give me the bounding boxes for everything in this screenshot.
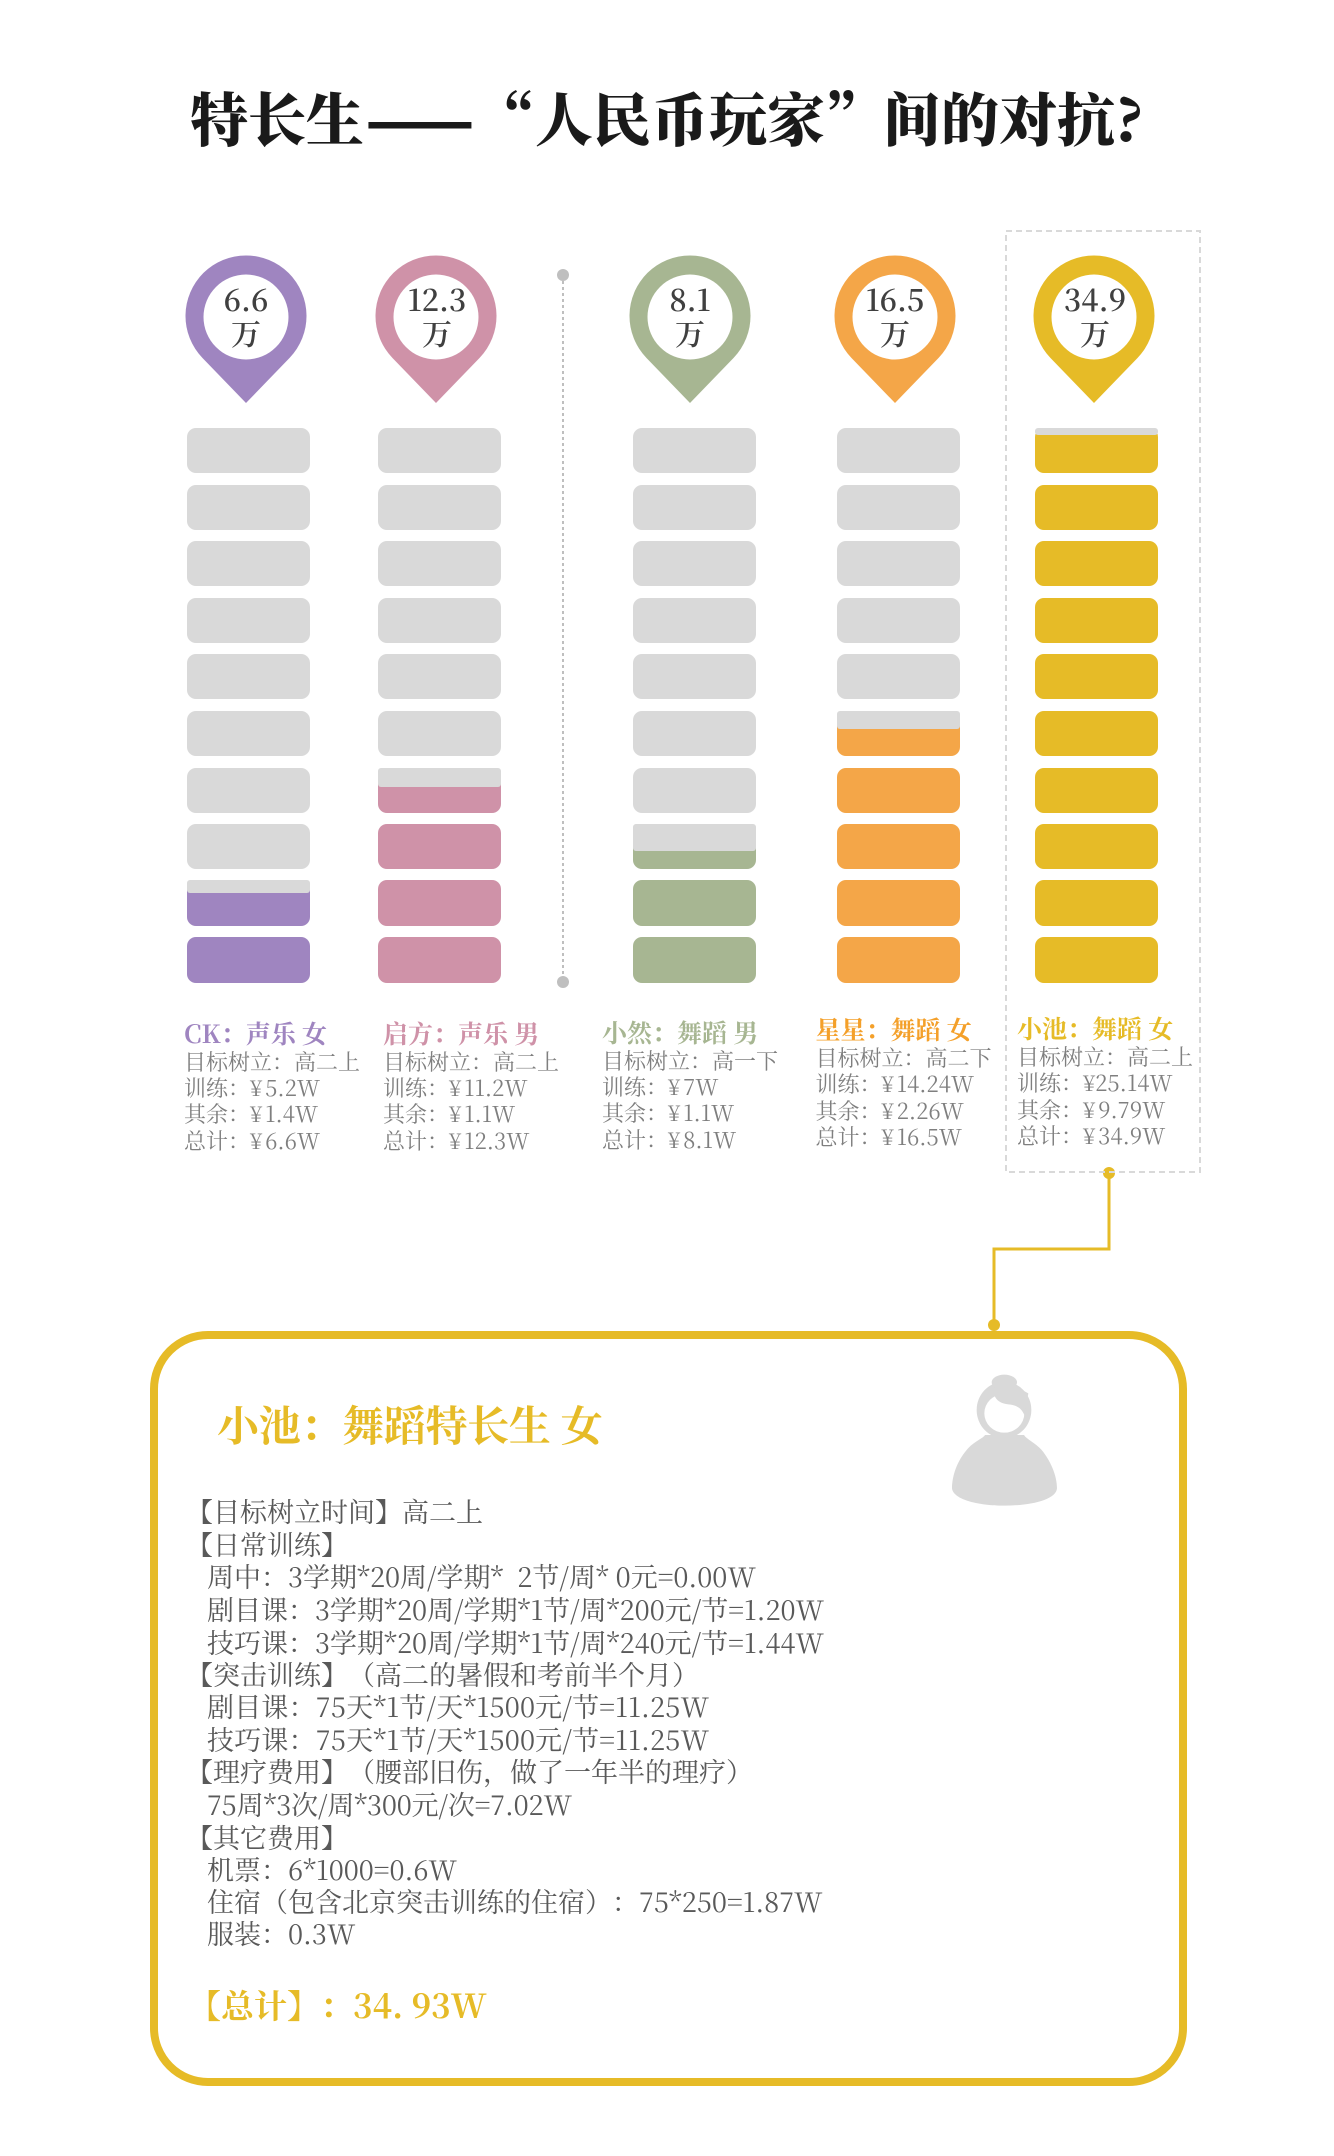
total: 【总计】：34. 93W — [188, 1981, 487, 2028]
panel: 小池 detail — [150, 1331, 1187, 2086]
text block: 小然 costs: 总计：¥8.1W — [602, 1124, 736, 1155]
icon: pin 16.5万 — [834, 256, 956, 403]
text block: 小池 costs — [1017, 1010, 1193, 1151]
text block: 小池 costs: 训练：¥25.14W — [1017, 1067, 1173, 1098]
text block: 星星 costs: 其余：¥2.26W — [816, 1095, 964, 1126]
text block: CK costs: CK：声乐 女 — [184, 1015, 327, 1051]
text block: itemized costs: 剧目课：3学期*20周/学期*1节/周*200元/节=1.20W — [207, 1589, 824, 1628]
text block: 小池 costs: 小池：舞蹈 女 — [1017, 1010, 1173, 1046]
text block: CK costs: 训练：¥5.2W — [184, 1072, 320, 1103]
text block: itemized costs: 【日常训练】 — [186, 1524, 348, 1563]
text block: CK costs: 其余：¥1.4W — [184, 1098, 318, 1129]
panel: CK column — [184, 256, 360, 1156]
text block: 启方 costs: 目标树立：高二上 — [383, 1046, 559, 1077]
text block: itemized costs: 技巧课：75天*1节/天*1500元/节=11.25W — [207, 1719, 709, 1758]
text block: itemized costs — [186, 1491, 824, 1952]
text block: 启方 costs — [383, 1015, 559, 1156]
icon: pin 8.1万: 8.1 — [669, 276, 711, 320]
panel: 小池 column — [1017, 256, 1193, 1151]
text block: itemized costs: 【其它费用】 — [186, 1817, 348, 1856]
icon: pin 8.1万: 万 — [675, 310, 705, 354]
icon: pin 12.3万: 12.3 — [408, 276, 466, 320]
text block: 启方 costs: 启方：声乐 男 — [383, 1015, 539, 1051]
text block: 启方 costs: 训练：¥11.2W — [383, 1072, 528, 1103]
icon: pin 6.6万 — [186, 256, 306, 403]
text block: 小池 costs: 其余：¥9.79W — [1017, 1094, 1165, 1125]
text block: 小然 costs: 目标树立：高一下 — [602, 1045, 778, 1076]
text block: 星星 costs — [816, 1011, 992, 1152]
icon: pin 12.3万 — [376, 256, 496, 403]
text block: itemized costs: 75周*3次/周*300元/次=7.02W — [207, 1784, 572, 1823]
connector from highlighted column to detail panel — [988, 1167, 1115, 1331]
bar stack — [187, 428, 310, 983]
text block: 星星 costs: 目标树立：高二下 — [816, 1042, 992, 1073]
text block: itemized costs: 机票：6*1000=0.6W — [207, 1849, 457, 1888]
text block: 启方 costs: 总计：¥12.3W — [383, 1125, 529, 1156]
text block: 星星 costs: 训练：¥14.24W — [816, 1068, 974, 1099]
text block: 小然 costs: 其余：¥1.1W — [602, 1097, 734, 1128]
text block: 小池 costs: 目标树立：高二上 — [1017, 1041, 1193, 1072]
dashed highlight frame — [1005, 230, 1201, 1173]
text block: 小然 costs: 小然：舞蹈 男 — [602, 1014, 758, 1050]
divider between singing and dance groups — [557, 269, 569, 988]
icon: pin 16.5万: 16.5 — [865, 276, 924, 320]
bar stack — [378, 428, 501, 983]
bar stack — [633, 428, 756, 983]
panel: 启方 column — [376, 256, 559, 1156]
text block: itemized costs: 剧目课：75天*1节/天*1500元/节=11.25W — [207, 1686, 709, 1725]
text block: itemized costs: 周中：3学期*20周/学期* 2节/周* 0元=0.00W — [207, 1556, 756, 1595]
text block: 星星 costs: 星星：舞蹈 女 — [816, 1011, 972, 1047]
icon: pin 34.9万 — [1034, 256, 1154, 403]
icon: pin 6.6万: 万 — [231, 310, 261, 354]
title: — — [416, 75, 475, 159]
icon: pin 12.3万: 万 — [422, 310, 452, 354]
text block: itemized costs: 【突击训练】（高二的暑假和考前半个月） — [186, 1654, 699, 1693]
icon: girl with hair bun — [952, 1374, 1057, 1506]
text block: 小然 costs: 训练：¥7W — [602, 1071, 718, 1102]
text block: CK costs: 总计：¥6.6W — [184, 1125, 320, 1156]
text block: itemized costs: 【目标树立时间】高二上 — [186, 1491, 483, 1530]
icon: pin 8.1万 — [630, 256, 750, 403]
text block: itemized costs: 服装：0.3W — [207, 1913, 355, 1952]
text block: itemized costs: 住宿（包含北京突击训练的住宿）：75*250=1.87W — [207, 1881, 822, 1920]
panel: 小然 column — [602, 256, 778, 1155]
text block: itemized costs: 【理疗费用】（腰部旧伤，做了一年半的理疗） — [186, 1751, 753, 1790]
title: — — [365, 75, 424, 159]
text block: 小然 costs — [602, 1014, 778, 1155]
icon: pin 16.5万: 万 — [880, 310, 910, 354]
text block: 星星 costs: 总计：¥16.5W — [816, 1121, 962, 1152]
title: 特长生 “人民币玩家”间的对抗? — [190, 74, 1144, 158]
text block: CK costs: 目标树立：高二上 — [184, 1046, 360, 1077]
icon: pin 34.9万: 34.9 — [1063, 276, 1126, 320]
bar stack — [837, 428, 960, 983]
text block: 启方 costs: 其余：¥1.1W — [383, 1098, 515, 1129]
bar stack — [1035, 428, 1158, 983]
icon: pin 6.6万: 6.6 — [224, 276, 268, 320]
text block: 小池 costs: 总计：¥34.9W — [1017, 1120, 1165, 1151]
text block: CK costs — [184, 1015, 360, 1156]
text block: itemized costs: 技巧课：3学期*20周/学期*1节/周*240元/节=1.44W — [207, 1622, 824, 1661]
panel: 星星 column — [816, 256, 992, 1152]
detail heading: 小池：舞蹈特长生 女 — [217, 1394, 603, 1454]
icon: pin 34.9万: 万 — [1080, 310, 1110, 354]
